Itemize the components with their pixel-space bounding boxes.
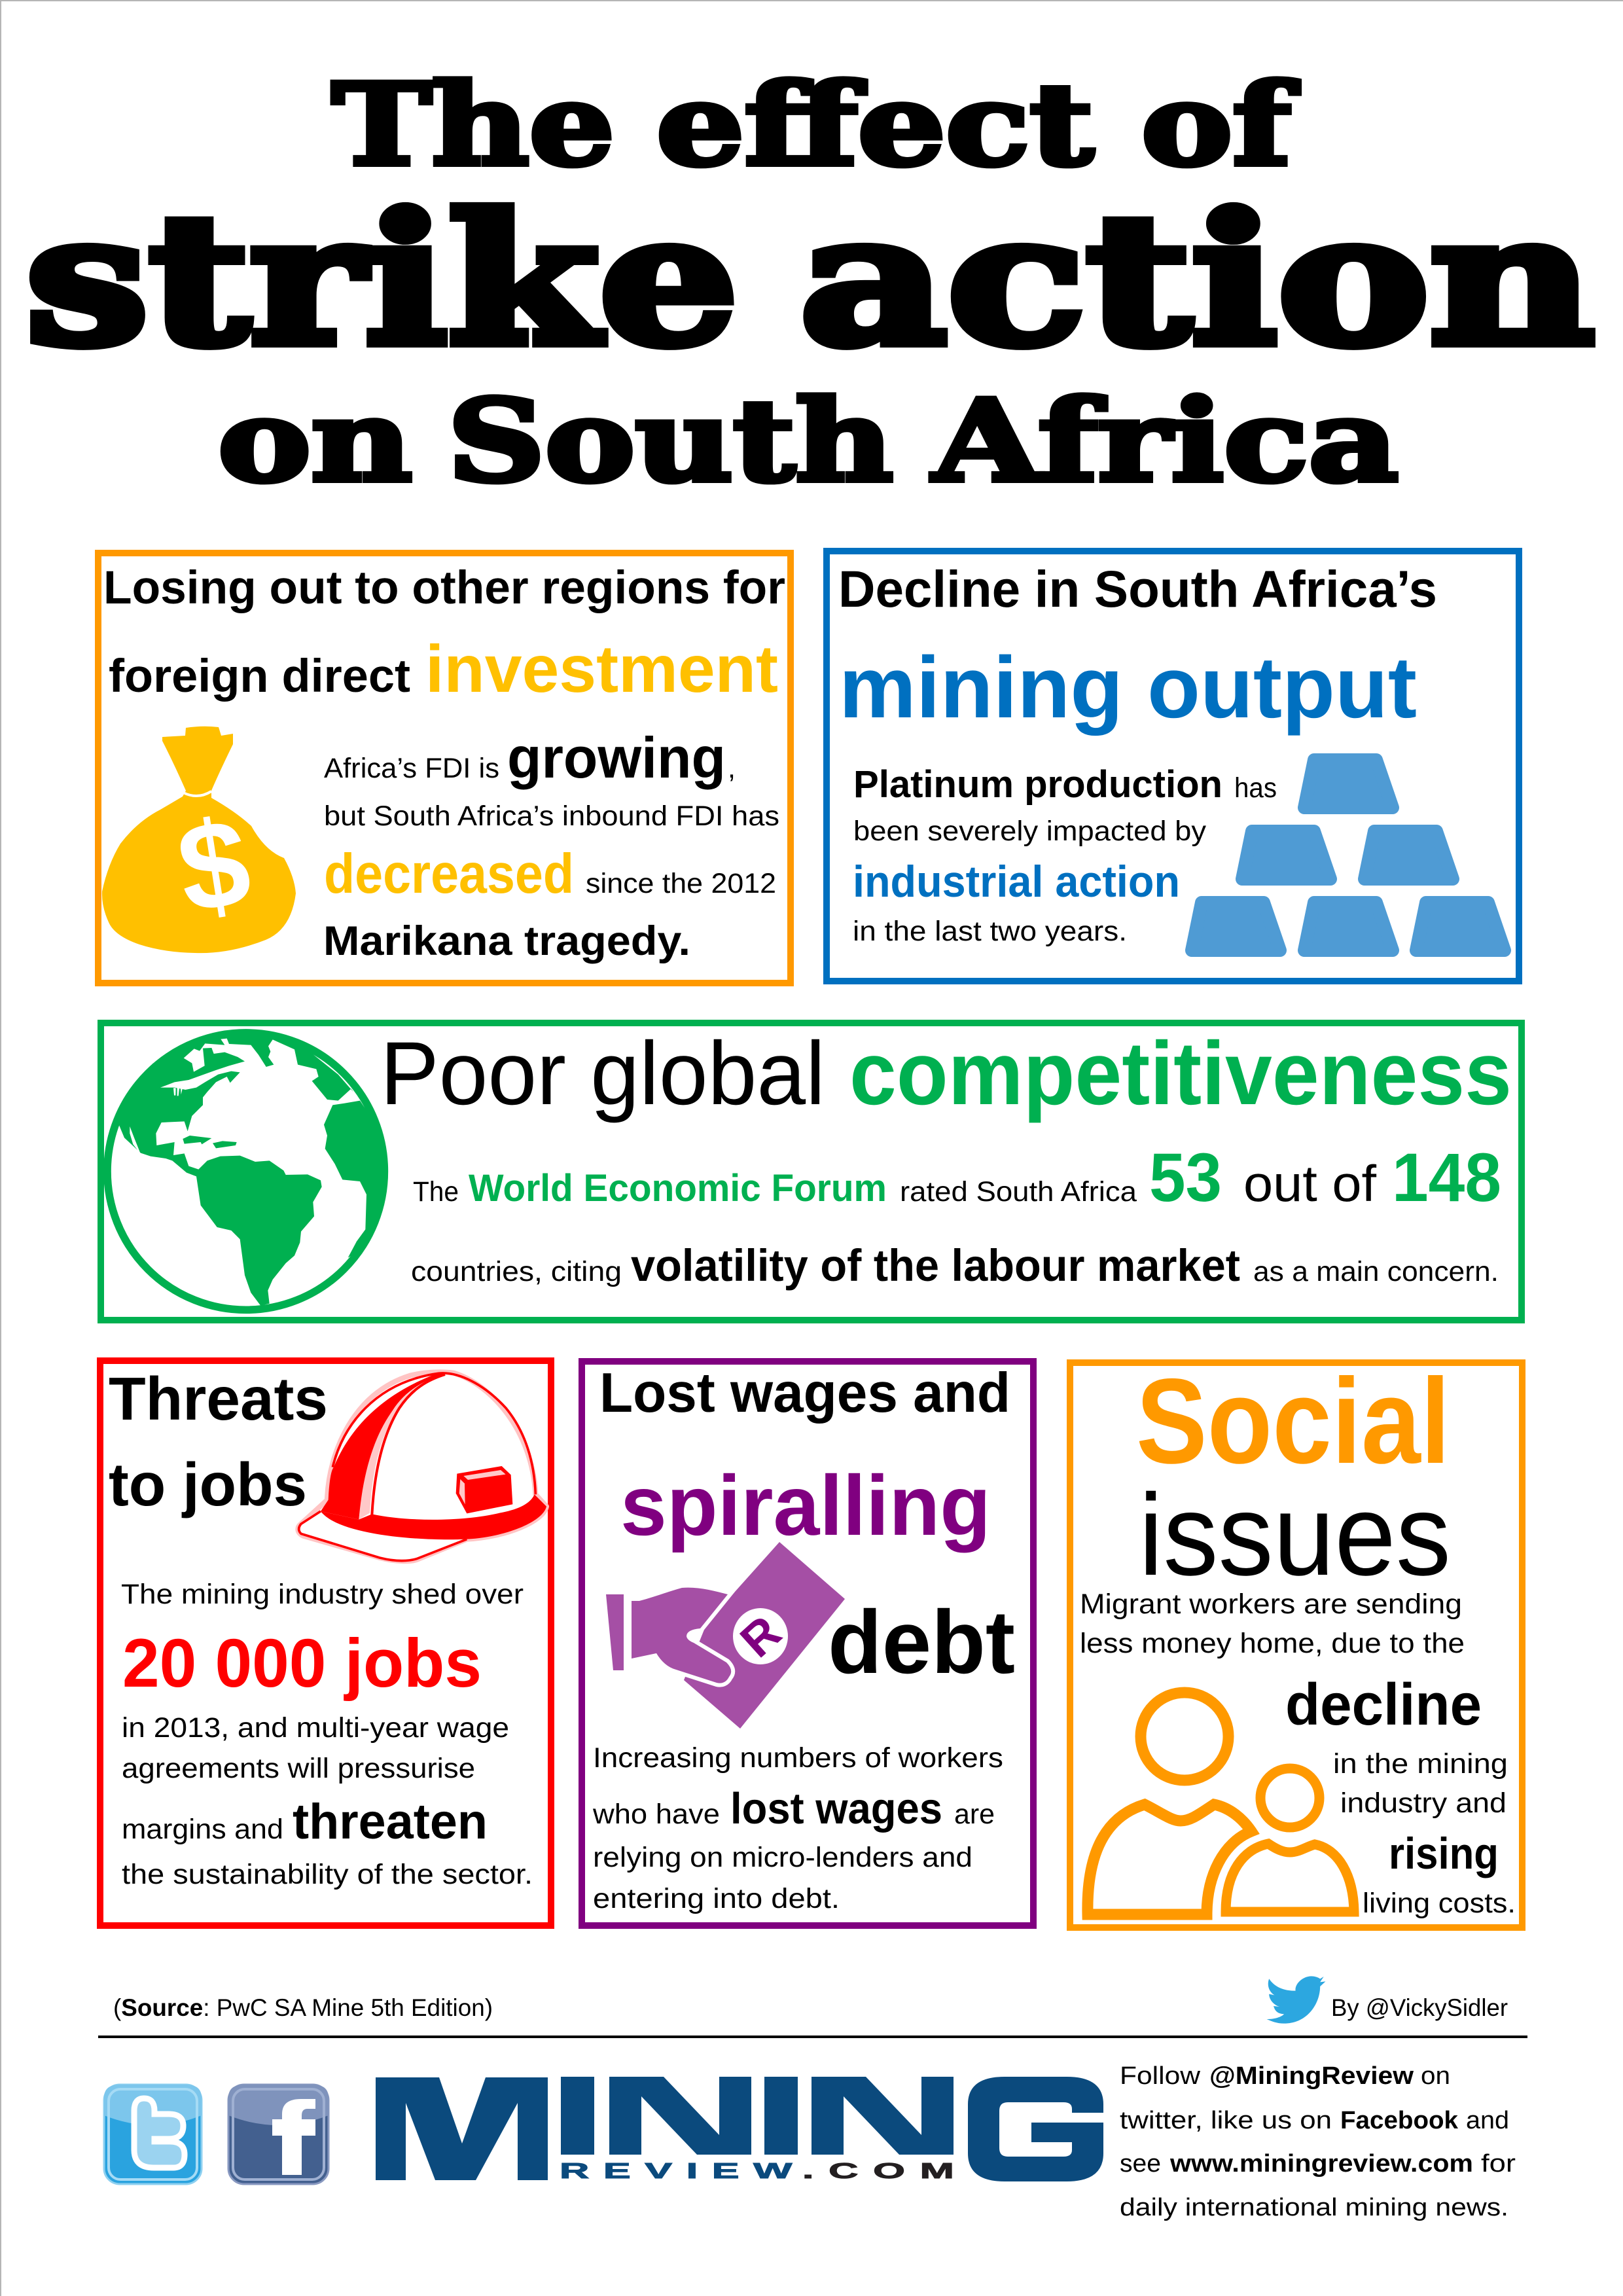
text block: platinum: industrial action [853,857,1180,906]
text block: World Economic Forum: World Economic Forum [469,1167,887,1210]
icon: people [1088,1693,1354,1914]
heading: competitiveness: Poor global [380,1024,825,1124]
text block: World Economic Forum: 148 [1392,1139,1501,1216]
text block: migrant workers: Migrant workers are sending [1080,1588,1462,1620]
text block: World Economic Forum: The [413,1176,459,1208]
text block: 20 000 jobs: threaten [293,1794,488,1850]
text block: FDI: growing [507,725,726,790]
text block: migrant workers: in the mining [1333,1748,1508,1780]
heading: competitiveness [380,1024,1512,1124]
text block: platinum: Platinum production [853,763,1222,806]
heading: mining output: Decline in South Africa’s [838,560,1437,618]
panel: social issues [1070,1354,1522,1928]
follow text: and [1466,2107,1509,2134]
text block: lost wages: lost wages [730,1784,942,1833]
text block: migrant workers [1080,1588,1516,1919]
text block: World Economic Forum: volatility of the labour market [631,1240,1240,1291]
text block: FDI: Africa’s FDI is [324,753,499,784]
panel border purple [582,1361,1033,1926]
title: strike [26,175,738,386]
panel border blue [827,551,1519,981]
text block: 20 000 jobs: 20 000 jobs [122,1625,482,1702]
panel: foreign direct investment [98,553,791,983]
heading: threats to jobs [109,1365,328,1518]
credit: By @VickySidler [1331,1994,1508,2021]
panel: mining output [827,551,1519,981]
heading: threats to jobs: Threats [109,1365,328,1433]
text block: lost wages: relying on micro-lenders and [593,1842,972,1873]
text block: migrant workers: rising [1389,1829,1499,1878]
title: South [448,374,893,507]
heading: social issues: issues [1139,1470,1451,1600]
text block: World Economic Forum: countries, citing [411,1256,622,1287]
heading: spiralling debt: spiralling [620,1458,991,1553]
heading: social issues [1136,1354,1451,1600]
text block: platinum: has [1234,772,1277,804]
text block: 20 000 jobs: The mining industry shed over [121,1579,524,1610]
title [26,58,1595,507]
text block: World Economic Forum: as a main concern. [1253,1256,1499,1287]
heading: investment: Losing out to other regions for [103,562,785,614]
heading: spiralling debt [599,1362,1015,1693]
icon: hand with banknote [606,1542,845,1729]
follow text: twitter, like us on [1120,2107,1332,2134]
icon: globe [107,1033,384,1310]
follow text: @MiningReview [1209,2062,1414,2090]
text block: FDI: decreased [324,843,574,905]
follow text: on [1421,2062,1450,2090]
text block: lost wages: entering into debt. [593,1883,840,1914]
panel border red [100,1361,551,1926]
panel: lost wages and debt [582,1361,1033,1926]
heading: mining output: mining output [839,639,1417,736]
follow text: see [1120,2150,1161,2178]
follow text: Follow [1120,2062,1201,2090]
icon: hard hat [298,1372,546,1561]
text block: migrant workers: less money home, due to the [1080,1628,1465,1659]
text block: 20 000 jobs [121,1579,533,1890]
source note: (Source: PwC SA Mine 5th Edition) [113,1994,493,2021]
panel border green [101,1023,1522,1320]
icon: twitter badge [104,2085,202,2184]
heading: spiralling debt: Lost wages and [599,1362,1010,1424]
follow text: Facebook [1340,2107,1459,2134]
text block: World Economic Forum [411,1139,1501,1291]
text block: migrant workers: living costs. [1363,1888,1516,1919]
title: of [1141,58,1299,191]
icon: twitter bird [1266,1976,1325,2024]
follow text: for [1481,2150,1516,2178]
heading: competitiveness: competitiveness [849,1024,1512,1124]
heading: mining output [838,560,1437,736]
panel border orange [98,553,791,983]
text block: migrant workers: industry and [1340,1787,1507,1819]
logo: Mining Review [376,2077,1103,2183]
text block: 20 000 jobs: the sustainability of the sector. [122,1859,533,1890]
follow text [1120,2062,1516,2221]
text block: platinum: been severely impacted by [853,816,1207,847]
text block: World Economic Forum: 53 [1149,1139,1222,1216]
text block: FDI: since the 2012 [586,868,776,899]
icon: facebook badge [228,2085,329,2184]
logo: Mining Review: .COM [802,2159,954,2183]
text block: 20 000 jobs: margins and [122,1814,283,1845]
logo: Mining Review: REVIEW [560,2159,793,2183]
panel: global competitiveness [101,1023,1522,1320]
heading: spiralling debt: debt [828,1592,1015,1693]
text block: lost wages: are [954,1799,995,1830]
text block: migrant workers: decline [1285,1672,1482,1738]
panel border orange [1070,1363,1522,1928]
icon: platinum bars [1192,760,1505,950]
title: action [800,175,1595,386]
text block: lost wages: who have [592,1799,720,1830]
text block: platinum [853,763,1277,947]
follow text: daily international mining news. [1120,2194,1508,2221]
icon: money bag [102,726,296,953]
heading: threats to jobs: to jobs [109,1450,307,1518]
text block: lost wages [592,1742,1003,1914]
text block: FDI [323,725,779,964]
text block: World Economic Forum: rated South Africa [900,1176,1137,1208]
follow text: www.miningreview.com [1169,2150,1473,2178]
text block: World Economic Forum: out of [1243,1155,1376,1212]
text block: FDI: Marikana tragedy. [323,918,690,964]
heading: investment: foreign direct [109,651,410,702]
icon: money bag: $ [169,792,259,940]
text block: FDI: but South Africa’s inbound FDI has [324,800,779,832]
text block: lost wages: Increasing numbers of workers [593,1742,1003,1774]
text block: FDI: , [728,753,736,784]
title: on [218,374,412,507]
title: The [332,58,615,191]
icon: hand with banknote: R [731,1606,791,1668]
heading: investment [103,562,785,706]
title: effect [656,58,1094,191]
heading: investment: investment [425,632,778,706]
panel: threats to jobs [100,1361,551,1926]
heading: social issues: Social [1136,1354,1450,1489]
title: Africa [931,374,1399,507]
text block: platinum: in the last two years. [853,916,1127,947]
text block: 20 000 jobs: in 2013, and multi-year wage [122,1712,509,1744]
text block: 20 000 jobs: agreements will pressurise [122,1753,475,1784]
